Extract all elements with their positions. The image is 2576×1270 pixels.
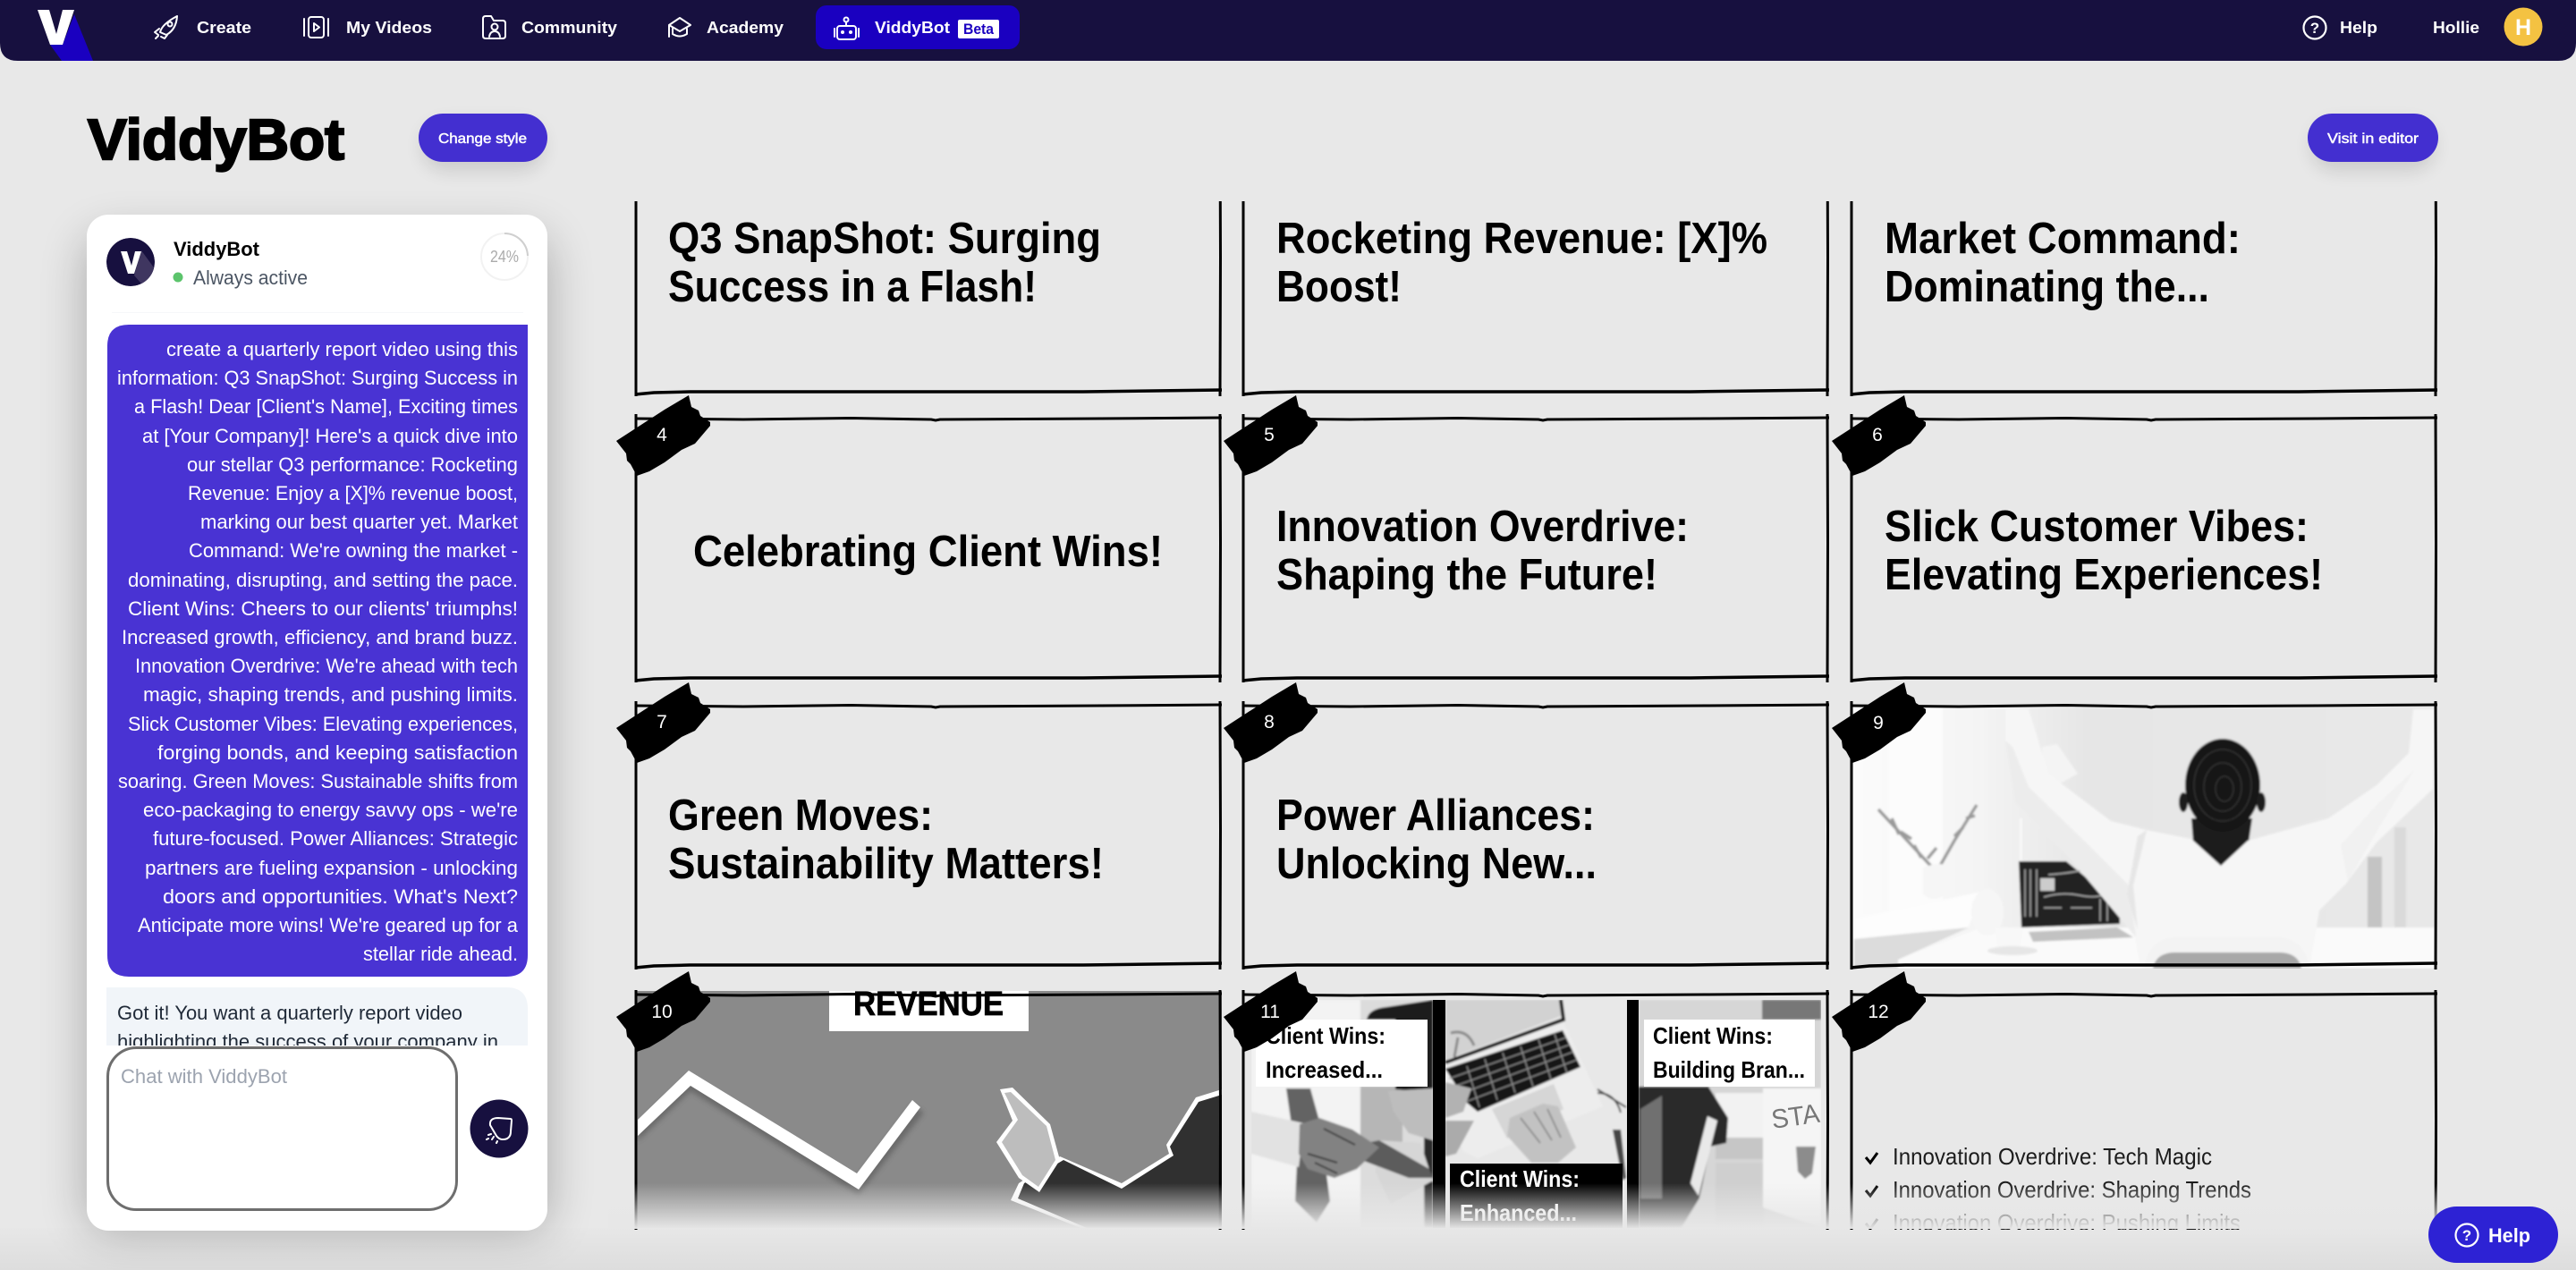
checklist: Innovation Overdrive: Tech Magic: [1893, 1143, 2212, 1170]
user message bubble: a Flash! Dear [Client's Name], Exciting times: [134, 395, 518, 418]
card 6: Slick Customer Vibes:: [1885, 503, 2309, 551]
card 11 photo: presenter at whiteboard: STA: [1769, 1099, 1821, 1135]
card 1: Q3 SnapShot: Surging: [668, 215, 1101, 263]
user message bubble: doors and opportunities. What's Next?: [163, 885, 518, 908]
chair posts and lamp: [2368, 857, 2382, 927]
nav: help: ?: [2310, 20, 2319, 37]
card 8: Power Alliances:: [1276, 792, 1595, 840]
card 5: [1224, 395, 1829, 682]
floating help button: Help: [2488, 1224, 2530, 1247]
nav: viddybot active pill: [816, 5, 1020, 49]
label: client wins enhanced: [1450, 1164, 1623, 1228]
card 11 photo: presenter at whiteboard: [1639, 1000, 1821, 1228]
user message bubble: Revenue: Enjoy a [X]% revenue boost,: [188, 482, 518, 504]
card 8: Unlocking New...: [1276, 840, 1597, 888]
status: Always active: [193, 267, 308, 289]
label: client wins increased: Client Wins:: [1266, 1022, 1385, 1049]
assistant message bubble: Got it! You want a quarterly report video: [117, 1002, 462, 1024]
card 7: Sustainability Matters!: [668, 840, 1104, 888]
card 2: Boost!: [1276, 263, 1402, 311]
user message bubble: information: Q3 SnapShot: Surging Success in: [117, 367, 518, 389]
progress ring: 24%: [490, 248, 519, 266]
label: client wins enhanced: Enhanced...: [1460, 1199, 1577, 1226]
chat input: [107, 1048, 456, 1209]
card 6: Elevating Experiences!: [1885, 551, 2323, 599]
card 1: Success in a Flash!: [668, 263, 1037, 311]
bottom fade over cards: [608, 1183, 2576, 1229]
label: client wins increased: [1256, 1020, 1428, 1087]
nav: community: [483, 16, 617, 38]
user message bubble: soaring. Green Moves: Sustainable shifts from: [118, 770, 518, 792]
user message bubble: at [Your Company]! Here's a quick dive into: [142, 425, 518, 447]
card 2: [1241, 201, 1829, 396]
label: client wins enhanced: Client Wins:: [1460, 1165, 1580, 1192]
cup: [1995, 927, 2023, 952]
label: client wins building brand: [1644, 1020, 1815, 1087]
cards row 4: [616, 971, 2437, 1258]
floating help button: [2428, 1206, 2558, 1263]
checklist: [1864, 1147, 2250, 1230]
page title: ViddyBot: [88, 107, 344, 172]
laptop: [2029, 927, 2133, 942]
card 3: Dominating the...: [1885, 263, 2209, 311]
card 11 photo: laptop from above: [1445, 1000, 1627, 1181]
beta badge: Beta: [963, 21, 994, 38]
card 4: 4: [657, 425, 667, 445]
cards row 1: [635, 201, 2437, 396]
nav: my videos: [304, 17, 432, 38]
card 7: [616, 682, 1222, 969]
user message bubble: eco-packaging to energy savvy ops - we're: [143, 799, 518, 821]
label: client wins building brand: Building Bran...: [1653, 1056, 1805, 1083]
chat header: [106, 233, 528, 291]
nav: create: Create: [197, 19, 251, 37]
card 8: 8: [1264, 712, 1275, 732]
card 11: 11: [1260, 1002, 1280, 1022]
nav: create: [155, 16, 251, 38]
card 2: Rocketing Revenue: [X]%: [1276, 215, 1767, 263]
user message bubble: Innovation Overdrive: We're ahead with tech: [135, 655, 518, 677]
assistant message bubble: highlighting the success of your company in: [117, 1030, 498, 1053]
bot avatar: [106, 238, 161, 291]
nav: user name: Hollie: [2433, 19, 2479, 37]
card 3: Market Command:: [1885, 215, 2241, 263]
progress ring: [481, 233, 528, 280]
card 6: [1832, 395, 2437, 682]
nav: community: Community: [521, 19, 617, 37]
chat header: ViddyBot: [174, 238, 260, 260]
storyboard grid: [616, 128, 2437, 1258]
man: shirt: [2030, 710, 2435, 927]
plant: [1877, 803, 1979, 867]
revenue label: [829, 991, 1029, 1031]
user avatar: H: [2515, 15, 2531, 40]
card 10 image: revenue chart and pointing hand: [636, 984, 1222, 1228]
label: client wins increased: Increased...: [1266, 1056, 1383, 1083]
card 10: 10: [651, 1002, 673, 1022]
assistant message bubble: [106, 987, 528, 1073]
card 11 photo: handshake: [1251, 1000, 1433, 1228]
card 11: [1224, 971, 1829, 1258]
cards row 2: [616, 395, 2437, 682]
button: visit in editor: [2308, 114, 2438, 171]
user message bubble: our stellar Q3 performance: Rocketing: [187, 453, 518, 476]
man: neck and head: [2191, 818, 2252, 868]
user message bubble: [107, 325, 528, 977]
card 5: Innovation Overdrive:: [1276, 503, 1689, 551]
card 3: [1850, 201, 2437, 396]
button: visit in editor: Visit in editor: [2327, 131, 2419, 147]
card 11 background: [1244, 995, 1827, 1228]
nav: academy: Academy: [707, 19, 784, 37]
card 9 photo: man celebrating at desk: [1852, 706, 2436, 970]
chair: [2144, 937, 2309, 969]
nav: help: Help: [2340, 19, 2377, 37]
card 1: [635, 201, 1222, 396]
checklist: Innovation Overdrive: Pushing Limits: [1893, 1209, 2241, 1236]
user message bubble: create a quarterly report video using this: [166, 338, 518, 360]
card 9: [1832, 682, 2437, 969]
cards row 3: [616, 682, 2437, 969]
bottom floor band: [0, 1228, 2576, 1270]
user message bubble: Anticipate more wins! We're geared up for a: [138, 914, 519, 936]
send button: [470, 1100, 528, 1157]
checklist: Innovation Overdrive: Shaping Trends: [1893, 1176, 2251, 1203]
user message bubble: Increased growth, efficiency, and brand buzz.: [122, 626, 518, 648]
card 4: [616, 395, 1222, 682]
card 5: 5: [1264, 425, 1275, 445]
user message bubble: stellar ride ahead.: [363, 943, 518, 965]
card 10 image: revenue chart and pointing hand: REVENUE: [853, 986, 1004, 1023]
user message bubble: Slick Customer Vibes: Elevating experiences,: [128, 713, 518, 735]
chat input: Chat with ViddyBot: [121, 1065, 287, 1088]
label: client wins building brand: Client Wins:: [1653, 1022, 1773, 1049]
user message bubble: dominating, disrupting, and setting the pace.: [128, 569, 518, 591]
user message bubble: marking our best quarter yet. Market: [200, 511, 518, 533]
card 7: 7: [657, 712, 667, 732]
button: change style: [419, 114, 547, 171]
user avatar: [2504, 7, 2542, 47]
logo: [38, 10, 93, 61]
user message bubble: partners are fueling expansion - unlocking: [145, 857, 518, 879]
card 7: Green Moves:: [668, 792, 933, 840]
card 5: Shaping the Future!: [1276, 551, 1657, 599]
card 10: [616, 971, 1222, 1258]
user message bubble: Client Wins: Cheers to our clients' triumphs!: [128, 597, 518, 620]
user message bubble: forging bonds, and keeping satisfaction: [157, 741, 518, 764]
user message bubble: future-focused. Power Alliances: Strategic: [153, 827, 518, 850]
floating help button: ?: [2462, 1227, 2471, 1244]
card 12: [1832, 971, 2437, 1258]
user message bubble: magic, shaping trends, and pushing limits.: [143, 683, 518, 706]
card 9: 9: [1873, 713, 1884, 733]
top navigation bar: [0, 0, 2576, 61]
nav: my videos: My Videos: [346, 19, 432, 37]
button: change style: Change style: [438, 131, 527, 147]
card 6: 6: [1872, 425, 1883, 445]
chat panel: [87, 215, 547, 1231]
card 8: [1224, 682, 1829, 969]
card 12: 12: [1868, 1002, 1889, 1022]
user message bubble: Command: We're owning the market -: [189, 539, 518, 562]
nav: viddybot active pill: ViddyBot: [875, 19, 950, 37]
nav: help: [2304, 16, 2377, 39]
card 4: Celebrating Client Wins!: [693, 528, 1163, 576]
nav: academy: [669, 18, 784, 37]
